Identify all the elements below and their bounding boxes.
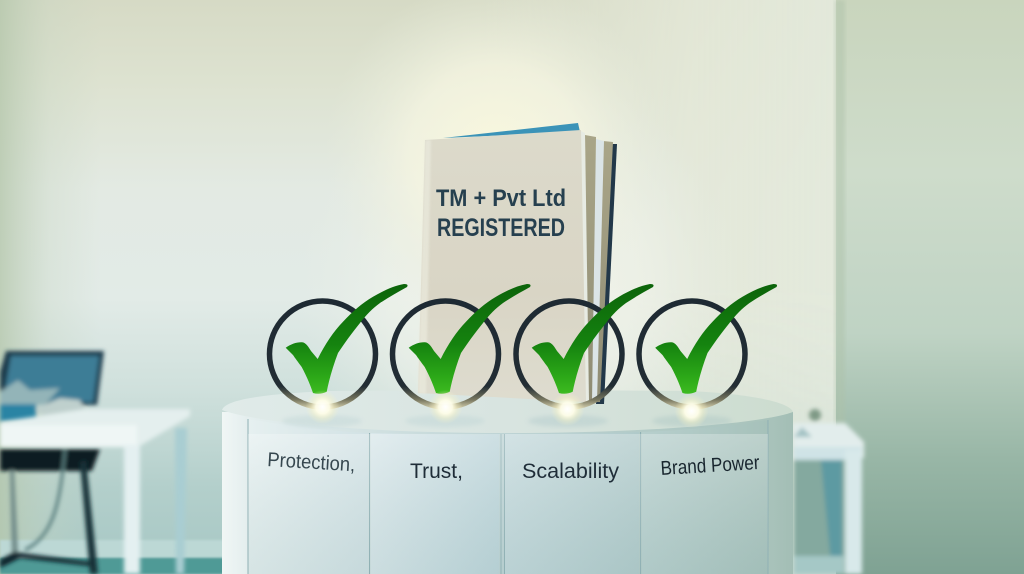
check 2: trust — [392, 284, 531, 427]
laptop — [0, 351, 104, 422]
check 1: protection — [270, 284, 408, 427]
chair — [0, 449, 100, 574]
book cover — [418, 130, 586, 402]
book pages — [443, 123, 617, 404]
floor and skirting — [0, 540, 225, 574]
panel seams — [248, 419, 768, 574]
cylinder podium — [222, 390, 793, 574]
check 3: scalability — [516, 284, 654, 427]
background: blurred side table — [793, 409, 864, 574]
panel: brand power — [642, 420, 768, 574]
panel: trust — [371, 433, 499, 574]
check 4: brand power — [639, 284, 777, 428]
book title: TM + Pvt Ltd — [436, 185, 566, 212]
panel: scalability — [505, 432, 639, 574]
desk — [0, 409, 190, 574]
label: trust: Trust, — [410, 460, 463, 483]
panel: protection — [248, 419, 368, 574]
background: blurred desk with laptop and chair — [0, 351, 190, 574]
podium top — [222, 390, 793, 433]
label: brand power: Brand Power — [660, 452, 760, 480]
label: scalability: Scalability — [522, 460, 620, 483]
book: TM + Pvt Ltd Registered — [418, 123, 617, 404]
podium body — [222, 412, 793, 574]
check marks row — [270, 284, 777, 428]
book subtitle: REGISTERED — [437, 214, 565, 242]
label: protection: Protection, — [267, 449, 356, 476]
